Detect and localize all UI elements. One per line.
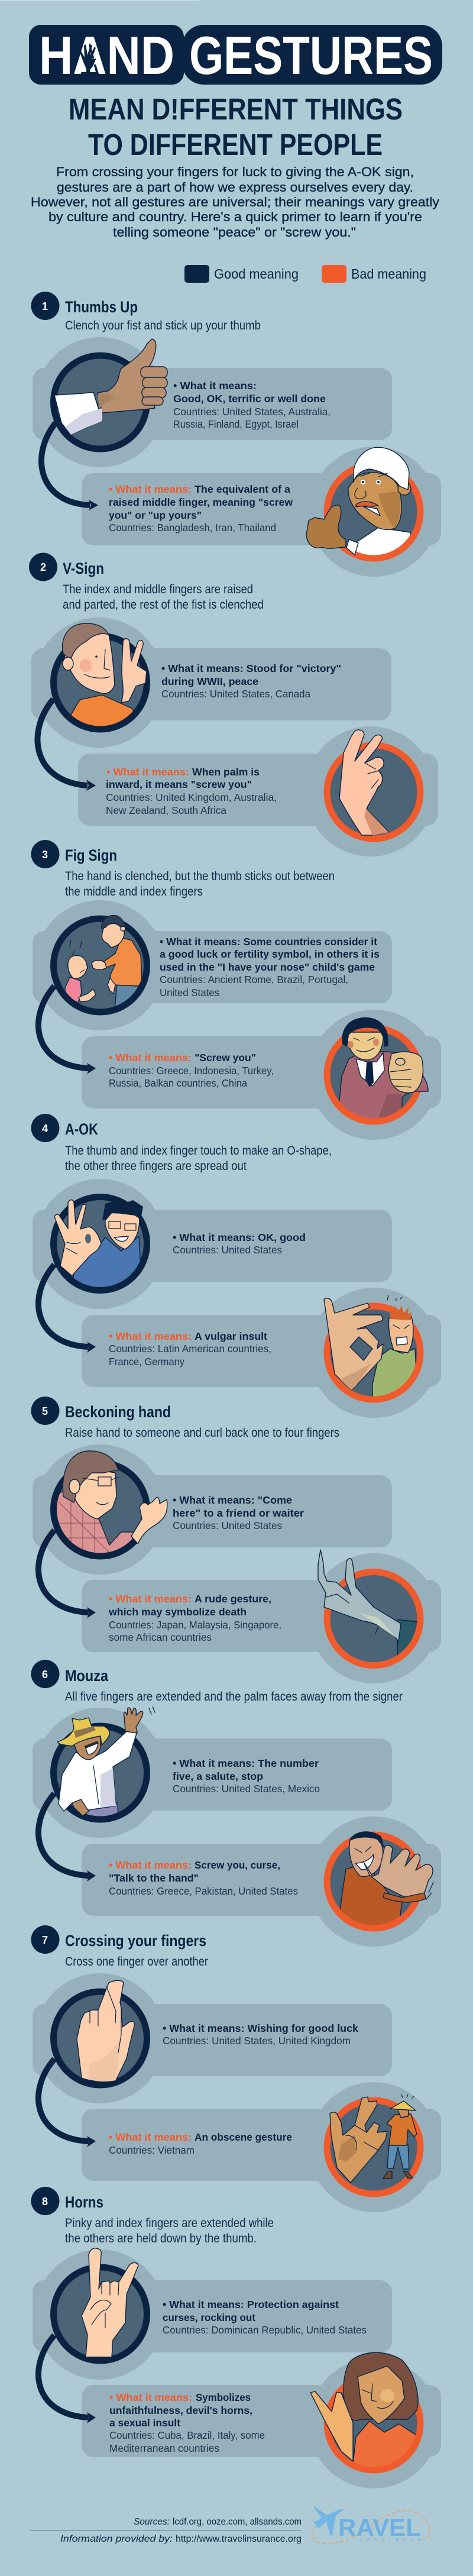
- arrow: [38, 986, 96, 1074]
- logo: Travel Insurance: insurance: [361, 2536, 421, 2542]
- heading: Crossing your fingers: [65, 1932, 206, 1950]
- number badge 7: [31, 1925, 59, 1954]
- panel: bad meaning: which may symbolize death: [108, 1606, 247, 1618]
- panel: good meaning: Countries: Ancient Rome, Brazil, Portugal,: [160, 974, 348, 985]
- number badge 8: 8: [42, 2196, 48, 2207]
- heading: Fig Sign: [65, 846, 117, 864]
- number badge 2: 2: [40, 561, 46, 573]
- panel: good meaning: [33, 1973, 392, 2103]
- panel: good meaning: • What it means: The number: [173, 1757, 319, 1769]
- heading: Beckoning hand: [65, 1403, 171, 1421]
- intro text: gestures are a part of how we express ourselves every day.: [57, 180, 413, 195]
- panel: bad meaning: [82, 1817, 441, 1947]
- panel: bad meaning: • What it means:: [109, 483, 192, 495]
- panel: bad meaning: Screw you, curse,: [195, 1859, 280, 1871]
- intro text: by culture and country. Here's a quick primer to learn if you're: [48, 209, 422, 224]
- subtitle: [69, 92, 403, 161]
- panel: good meaning: [33, 2249, 392, 2380]
- intro text: However, not all gestures are universal; their meanings vary greatly: [31, 195, 439, 209]
- description: All five fingers are extended and the palm faces away from the signer: [65, 1689, 403, 1704]
- description: the middle and index fingers: [65, 884, 203, 898]
- panel: bad meaning: [82, 447, 441, 577]
- panel: bad meaning: "Talk to the hand": [109, 1872, 199, 1884]
- panel: good meaning: curses, rocking out: [163, 2312, 255, 2323]
- description: Clench your fist and stick up your thumb: [65, 318, 261, 332]
- panel: good meaning: • What it means: "Come: [173, 1494, 292, 1506]
- illustration: man with glasses giving A-OK: [53, 1197, 147, 1291]
- intro text: [31, 164, 439, 240]
- number badge 5: 5: [42, 1405, 48, 1417]
- panel: good meaning: • What it means: Protection against: [163, 2299, 339, 2310]
- panel: good meaning: Russia, Finland, Egypt, Israel: [173, 418, 299, 430]
- illustration: hand with inward V sign: [327, 730, 420, 839]
- panel: bad meaning: Russia, Balkan countries, China: [109, 1077, 247, 1089]
- arrow: [38, 2335, 96, 2423]
- illustration: man playing nose game with child: [53, 916, 147, 1012]
- heading: A-OK: [65, 1120, 98, 1138]
- number badge 6: [31, 1660, 59, 1688]
- section 2: V-Sign: [29, 552, 438, 856]
- subtitle: MEAN D!FFERENT THINGS: [69, 92, 403, 126]
- panel: good meaning: United States: [160, 987, 219, 998]
- description: The index and middle fingers are raised: [63, 582, 253, 596]
- panel: bad meaning: • What it means:: [109, 1052, 192, 1064]
- number badge 7: 7: [42, 1934, 48, 1946]
- icon: crossed fingers hand: [53, 1980, 147, 2085]
- heading: V-Sign: [63, 560, 104, 577]
- arrow: [38, 1793, 96, 1882]
- illustration: man with talk to the hand: [327, 1831, 433, 1934]
- section 6: Mouza: [31, 1660, 441, 1947]
- panel: bad meaning: • What it means:: [109, 1330, 192, 1342]
- panel: bad meaning: you" or "up yours": [109, 509, 202, 521]
- description: the other three fingers are spread out: [65, 1159, 247, 1173]
- description: [63, 582, 264, 612]
- arrow: [41, 423, 98, 510]
- panel: bad meaning: • What it means:: [106, 766, 189, 778]
- panel: good meaning: Countries: United States, United Kingdom: [163, 2035, 351, 2047]
- illustration: crossed fingers with Vietnamese man: [327, 2095, 420, 2194]
- panel: good meaning: here" to a friend or waiter: [173, 1507, 304, 1519]
- arrow: [38, 699, 96, 791]
- description: and parted, the rest of the fist is clenched: [63, 597, 264, 612]
- panel: bad meaning: Countries: Bangladesh, Iran, Thailand: [109, 522, 276, 534]
- panel: bad meaning: [82, 1553, 441, 1683]
- number badge 8: [31, 2187, 59, 2215]
- description: [65, 869, 335, 898]
- panel: bad meaning: [78, 726, 438, 856]
- arrow: [38, 2059, 96, 2147]
- panel: bad meaning: "Screw you": [195, 1052, 256, 1064]
- section 5: Beckoning hand: [31, 1397, 441, 1683]
- section 3: Fig Sign: [31, 840, 441, 1140]
- number badge 4: [31, 1114, 59, 1142]
- panel: bad meaning: • What it means:: [109, 2131, 192, 2143]
- panel: bad meaning: Mediterranean countries: [109, 2442, 219, 2454]
- panel: good meaning: [33, 337, 392, 467]
- panel: bad meaning: When palm is: [192, 766, 260, 778]
- description: Raise hand to someone and curl back one to four fingers: [65, 1426, 339, 1440]
- panel: bad meaning: some African countries: [109, 1631, 212, 1643]
- number badge 1: [31, 292, 59, 320]
- title: Hand Gestures: HAND: [39, 26, 174, 86]
- number badge 4: 4: [42, 1123, 48, 1135]
- panel: good meaning: a good luck or fertility symbol, in others it is: [160, 948, 380, 960]
- description: The hand is clenched, but the thumb sticks out between: [65, 869, 335, 883]
- panel: bad meaning: Symbolizes: [196, 2391, 251, 2403]
- panel: bad meaning: • What it means:: [109, 1859, 192, 1871]
- icon: horns hand: [53, 2248, 147, 2361]
- panel: good meaning: [33, 900, 392, 1030]
- intro text: telling someone "peace" or "screw you.": [113, 225, 356, 240]
- number badge 3: 3: [42, 849, 48, 861]
- panel: bad meaning: A rude gesture,: [195, 1593, 271, 1605]
- legend: Good meaning: [214, 266, 299, 282]
- panel: bad meaning: [82, 2358, 441, 2488]
- description: the others are held down by the thumb.: [65, 2231, 257, 2245]
- panel: good meaning: Good, OK, terrific or well done: [173, 393, 326, 405]
- panel: good meaning: • What it means: Wishing for good luck: [163, 2022, 358, 2034]
- description: Cross one finger over another: [65, 1954, 208, 1969]
- illustration: grey beckoning hand: [318, 1550, 420, 1666]
- panel: bad meaning: [82, 1010, 441, 1140]
- panel: bad meaning: Countries: Vietnam: [109, 2144, 195, 2156]
- footer: sources and credit: [30, 2517, 302, 2544]
- panel: good meaning: Countries: United States: [173, 1520, 282, 1531]
- logo: Travel Insurance: RAVEL: [338, 2514, 421, 2541]
- legend: [184, 265, 426, 283]
- panel: good meaning: Countries: United States: [173, 1244, 282, 1256]
- panel: good meaning: [33, 1179, 392, 1309]
- panel: bad meaning: A vulgar insult: [195, 1330, 267, 1342]
- panel: bad meaning: New Zealand, South Africa: [106, 804, 226, 816]
- panel: bad meaning: Countries: Greece, Pakistan, United States: [109, 1885, 298, 1897]
- footer: sources and credit: Sources:: [134, 2517, 170, 2527]
- panel: good meaning: [31, 618, 391, 748]
- footer: sources and credit: Information provided by:: [60, 2534, 173, 2544]
- arrow: [38, 1265, 96, 1353]
- panel: bad meaning: [82, 1288, 441, 1418]
- panel: good meaning: Countries: United States, Mexico: [173, 1783, 320, 1795]
- illustration: angry man in turban: [306, 447, 420, 562]
- legend: Bad meaning: [351, 266, 426, 282]
- number badge 1: 1: [42, 300, 48, 312]
- panel: bad meaning: An obscene gesture: [195, 2131, 292, 2143]
- heading: Mouza: [65, 1667, 108, 1685]
- heading: Horns: [65, 2193, 103, 2211]
- number badge 3: [31, 840, 59, 868]
- panel: bad meaning: unfaithfulness, devil's horns,: [109, 2404, 252, 2416]
- panel: good meaning: during WWII, peace: [161, 675, 258, 687]
- panel: good meaning: Countries: Dominican Republic, United States: [163, 2324, 367, 2336]
- icon: hand inside the letter A: [80, 44, 96, 74]
- panel: bad meaning: raised middle finger, meaning "screw: [109, 496, 293, 508]
- panel: good meaning: five, a salute, stop: [173, 1770, 263, 1782]
- subtitle: TO DIFFERENT PEOPLE: [88, 128, 383, 161]
- illustration: schoolgirl with fig sign: [327, 1017, 428, 1124]
- panel: bad meaning: France, Germany: [109, 1356, 184, 1368]
- heading: Thumbs Up: [65, 298, 138, 316]
- intro text: From crossing your fingers for luck to giving the A-OK sign,: [56, 164, 414, 179]
- illustration: woman with horns hand: [310, 2352, 421, 2475]
- panel: bad meaning: Countries: Greece, Indonesia, Turkey,: [109, 1065, 274, 1077]
- section 7: Crossing your fingers: [31, 1925, 441, 2212]
- description: The thumb and index finger touch to make an O-shape,: [65, 1143, 332, 1158]
- panel: good meaning: Countries: United States, Canada: [161, 688, 310, 700]
- number badge 5: [31, 1397, 59, 1425]
- number badge 2: [29, 552, 57, 581]
- footer: sources and credit: http://www.travelinsurance.org: [176, 2534, 302, 2544]
- panel: bad meaning: a sexual insult: [109, 2417, 180, 2429]
- logo: Travel Insurance: [313, 2506, 430, 2543]
- panel: bad meaning: The equivalent of a: [195, 483, 290, 495]
- panel: bad meaning: Countries: United Kingdom, Australia,: [106, 791, 277, 803]
- panel: good meaning: used in the "I have your nose" child's game: [160, 961, 375, 973]
- description: Pinky and index fingers are extended while: [65, 2216, 274, 2230]
- illustration: smiling man with V sign: [53, 623, 147, 731]
- icon: thumbs up in navy ring: [53, 339, 167, 449]
- panel: bad meaning: • What it means:: [109, 1593, 192, 1605]
- illustration: man with glasses beckoning: [51, 1451, 167, 1562]
- panel: bad meaning: • What it means:: [109, 2391, 192, 2403]
- panel: good meaning: • What it means: Stood for "victory": [161, 662, 341, 674]
- panel: good meaning: Countries: United States, Australia,: [173, 406, 331, 418]
- panel: bad meaning: Countries: Latin American countries,: [109, 1343, 271, 1355]
- section 1: Thumbs Up: [31, 292, 441, 577]
- panel: bad meaning: Countries: Japan, Malaysia, Singapore,: [109, 1619, 281, 1631]
- panel: good meaning: • What it means: OK, good: [173, 1232, 306, 1243]
- footer: sources and credit: lcdf.org, ooze.com, allsands.com: [173, 2517, 302, 2527]
- description: [65, 2216, 274, 2245]
- panel: good meaning: [33, 1444, 392, 1575]
- description: [65, 1143, 332, 1173]
- panel: bad meaning: Countries: Cuba, Brazil, Italy, some: [109, 2429, 265, 2441]
- panel: good meaning: • What it means: Some countries consider it: [160, 936, 377, 948]
- number badge 6: 6: [42, 1669, 48, 1680]
- panel: good meaning: • What it means:: [173, 380, 257, 392]
- section 4: A-OK: [31, 1114, 441, 1418]
- panel: good meaning: [33, 1708, 392, 1838]
- panel: bad meaning: inward, it means "screw you": [106, 778, 252, 790]
- illustration: cowboy waving: [53, 1706, 155, 1825]
- section 8: Horns: [31, 2187, 441, 2488]
- arrow: [38, 1530, 96, 1618]
- illustration: big vulgar OK hand with angry man: [324, 1295, 420, 1399]
- title: Hand Gestures: [29, 25, 442, 86]
- panel: bad meaning: [82, 2082, 441, 2212]
